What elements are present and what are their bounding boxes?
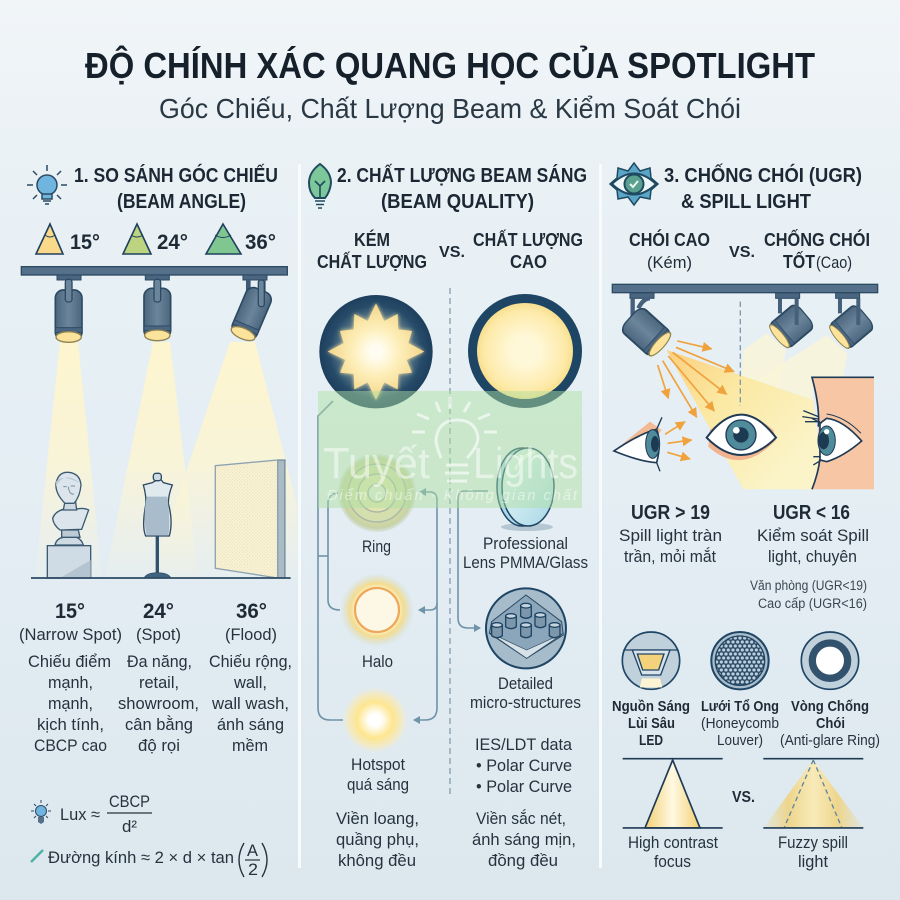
label: fuzzy spill (778, 834, 848, 871)
labels: 36 degree column: 36° (236, 600, 267, 623)
labels: 24 degree column: showroom, (118, 694, 199, 713)
text: high quality: ánh sáng mịn, (472, 830, 576, 849)
comparison headings: CHẤT LƯỢNG (317, 251, 427, 272)
label: honeycomb (701, 698, 779, 749)
text: poor quality (336, 809, 419, 870)
label: micro-structures (470, 675, 581, 712)
watermark: Tuyết (323, 439, 430, 488)
label: recessed LED (612, 698, 690, 749)
comparison headings: CHỐNG CHÓI (764, 229, 870, 250)
labels: 36 degree column: wall, (233, 673, 267, 692)
comparison headings: CHẤT LƯỢNG (473, 229, 583, 250)
angle badges: 15° (70, 231, 100, 254)
heading: section 1 (74, 163, 278, 213)
labels: 36 degree column: mềm (232, 736, 268, 755)
icon: recessed LED (622, 632, 680, 689)
label: fuzzy spill: light (798, 853, 828, 871)
formula: lux: CBCP (109, 792, 150, 811)
text: UGR below 16: Văn phòng (UGR<19) (750, 578, 867, 593)
label: lens: Lens PMMA/Glass (463, 554, 588, 572)
labels: 15 degree column: 15° (55, 600, 85, 623)
label: anti-glare ring: (Anti-glare Ring) (780, 732, 880, 749)
soft beams of good fixtures (742, 333, 847, 400)
comparison headings (317, 229, 583, 272)
panel: anti-glare (603, 163, 900, 871)
label: micro-structures: micro-structures (470, 694, 581, 712)
labels: 36 degree column: Chiếu rộng, (209, 652, 292, 671)
good beam: clean circle (468, 294, 582, 408)
text: UGR below 16: light, chuyên (768, 547, 857, 566)
label: lens (463, 535, 588, 572)
formula: beam diameter (31, 841, 267, 879)
text: IES data (475, 735, 573, 796)
comparison headings: (Cao) (816, 253, 852, 272)
labels: 24 degree column: retail, (139, 673, 179, 692)
labels: 24 degree column: cân bằng (125, 715, 193, 734)
heading: section 2: 2. CHẤT LƯỢNG BEAM SÁNG (337, 164, 587, 187)
text: UGR below 16: UGR < 16 (773, 502, 850, 524)
centre divider (738, 302, 742, 406)
text: IES data: • Polar Curve (476, 756, 572, 775)
text: UGR above 19: UGR > 19 (631, 502, 710, 524)
icon: green bulb (309, 164, 331, 208)
comparison headings: VS. (439, 244, 465, 261)
face profile (812, 377, 874, 489)
comparison headings: TỐT (783, 251, 815, 272)
label: high contrast: High contrast (628, 834, 718, 852)
formula: beam diameter: Đường kính ≈ 2 × d × tan (48, 848, 234, 867)
text: IES data: IES/LDT data (475, 735, 573, 754)
text: UGR below 16 (750, 502, 869, 611)
icon: lens (497, 448, 554, 531)
heading: section 1: (BEAM ANGLE) (117, 191, 246, 213)
text: UGR above 19: trần, mỏi mắt (624, 547, 716, 566)
defect: halo (340, 573, 414, 671)
text: poor quality: Viền loang, (336, 809, 419, 828)
labels: 24 degree column: (Spot) (136, 625, 181, 644)
glare arrows (658, 341, 734, 459)
labels: 15 degree column: Chiếu điểm (28, 652, 111, 671)
defect: hotspot (342, 687, 409, 794)
labels: 36 degree column: (Flood) (225, 625, 277, 644)
heading: section 3: 3. CHỐNG CHÓI (UGR) (664, 163, 862, 187)
label: honeycomb: Lưới Tổ Ong (701, 698, 779, 715)
defect: ring: Ring (362, 538, 391, 556)
formula: beam diameter: 2 (248, 860, 258, 879)
formula: lux (31, 792, 152, 836)
text: UGR above 19: Spill light tràn (619, 526, 722, 545)
comparison headings: CAO (510, 252, 547, 272)
watermark (318, 391, 582, 508)
heading: section 3 (664, 163, 862, 213)
panel: beam quality (302, 164, 598, 870)
heading: section 2: (BEAM QUALITY) (381, 191, 534, 213)
comparison headings: CHÓI CAO (629, 229, 710, 250)
formula: lux: d² (122, 817, 137, 836)
angle badges: 36° (245, 231, 276, 254)
track rail (612, 284, 878, 293)
label: vs: VS. (732, 789, 755, 806)
heading: section 3: & SPILL LIGHT (681, 191, 811, 213)
labels: 15 degree column: (Narrow Spot) (19, 625, 122, 644)
heading: section 2 (337, 164, 587, 213)
labels: 36 degree column: wall wash, (211, 694, 289, 713)
labels: 24 degree column: Đa năng, (127, 652, 192, 671)
angle badges: 24° (157, 231, 188, 254)
label: honeycomb: (Honeycomb (701, 715, 779, 732)
label: fuzzy spill: Fuzzy spill (778, 834, 848, 852)
icon: blue light bulb (27, 165, 67, 204)
defect: halo: Halo (362, 653, 393, 671)
label: anti-glare ring: Vòng Chống (791, 698, 869, 715)
labels: 15 degree column (19, 600, 122, 755)
light beams (35, 342, 297, 578)
text: high quality: Viền sắc nét, (476, 809, 566, 828)
icon: small bulb (31, 800, 51, 824)
text: UGR above 19 (619, 502, 722, 566)
comparison headings: VS. (729, 244, 755, 261)
comparison headings: (Kém) (647, 253, 692, 272)
glaring fixture (620, 293, 674, 359)
watermark: Lights (473, 439, 578, 488)
connector lines (318, 401, 488, 724)
labels: 15 degree column: mạnh, (48, 673, 93, 692)
comparison headings: KÉM (354, 229, 390, 250)
title: ĐỘ CHÍNH XÁC QUANG HỌC CỦA SPOTLIGHT (85, 44, 815, 86)
label: honeycomb: Louver) (717, 732, 763, 749)
track rail with spotlights (21, 267, 287, 344)
icons: anti-glare devices (622, 632, 859, 689)
watermark: Điểm chuẩn - Không gian chất (327, 488, 578, 504)
comparison headings (629, 229, 870, 272)
icon: gear eye (610, 163, 658, 205)
diagram: high contrast vs fuzzy (623, 759, 863, 828)
high contrast cone (623, 759, 723, 828)
label: recessed LED: Lùi Sâu (628, 715, 675, 732)
text: poor quality: không đều (338, 851, 416, 870)
label: recessed LED: LED (639, 732, 663, 749)
angle badges (36, 224, 276, 254)
labels: 24 degree column (118, 600, 199, 755)
defect: hotspot: quá sáng (347, 776, 409, 794)
fuzzy cone (763, 759, 863, 828)
label: lens: Professional (483, 535, 568, 553)
label: micro-structures: Detailed (498, 675, 553, 693)
text: IES data: • Polar Curve (476, 777, 572, 796)
wall panel (215, 460, 285, 578)
mannequin (143, 473, 172, 578)
bust on pedestal (47, 472, 91, 578)
labels: 36 degree column (209, 600, 292, 755)
text: poor quality: quầng phụ, (336, 830, 419, 849)
glare scene (612, 284, 878, 489)
heading: section 1: 1. SO SÁNH GÓC CHIẾU (74, 163, 278, 187)
label: anti-glare ring: Chói (816, 715, 845, 732)
labels: 24 degree column: độ rọi (138, 736, 180, 755)
eye: left profile (614, 417, 662, 471)
labels: 24 degree column: 24° (143, 600, 174, 623)
eye: front (707, 415, 776, 460)
subtitle: Góc Chiếu, Chất Lượng Beam & Kiểm Soát Chói (159, 93, 741, 124)
labels: 15 degree column: CBCP cao (34, 736, 107, 755)
label: high contrast: focus (654, 853, 691, 871)
defect: hotspot: Hotspot (351, 756, 405, 774)
text: UGR below 16: Cao cấp (UGR<16) (758, 596, 867, 611)
glare cone (667, 350, 820, 489)
formula: lux: Lux ≈ (60, 805, 100, 824)
illustrated objects: bust, mannequin, wall (31, 460, 291, 578)
text: high quality: đồng đều (488, 851, 558, 870)
label: high contrast (628, 834, 718, 871)
labels: 15 degree column: mạnh, (48, 694, 93, 713)
face outline (812, 377, 874, 489)
poor beam: jagged circle (319, 295, 433, 408)
label: anti-glare ring (780, 698, 880, 749)
eye: right profile (802, 411, 862, 465)
labels: 15 degree column: kịch tính, (37, 715, 104, 734)
formula: beam diameter: A (247, 841, 259, 860)
icon: micro-structures (486, 588, 566, 668)
good fixtures (767, 293, 875, 351)
text: UGR below 16: Kiểm soát Spill (757, 526, 869, 545)
text: high quality (472, 809, 576, 870)
defect: ring (338, 454, 416, 556)
labels: 36 degree column: ánh sáng (217, 715, 284, 734)
icon: honeycomb louver (711, 632, 769, 689)
label: recessed LED: Nguồn Sáng (612, 698, 690, 715)
panel: beam angle (0, 163, 297, 879)
icon: anti-glare ring (801, 632, 859, 689)
